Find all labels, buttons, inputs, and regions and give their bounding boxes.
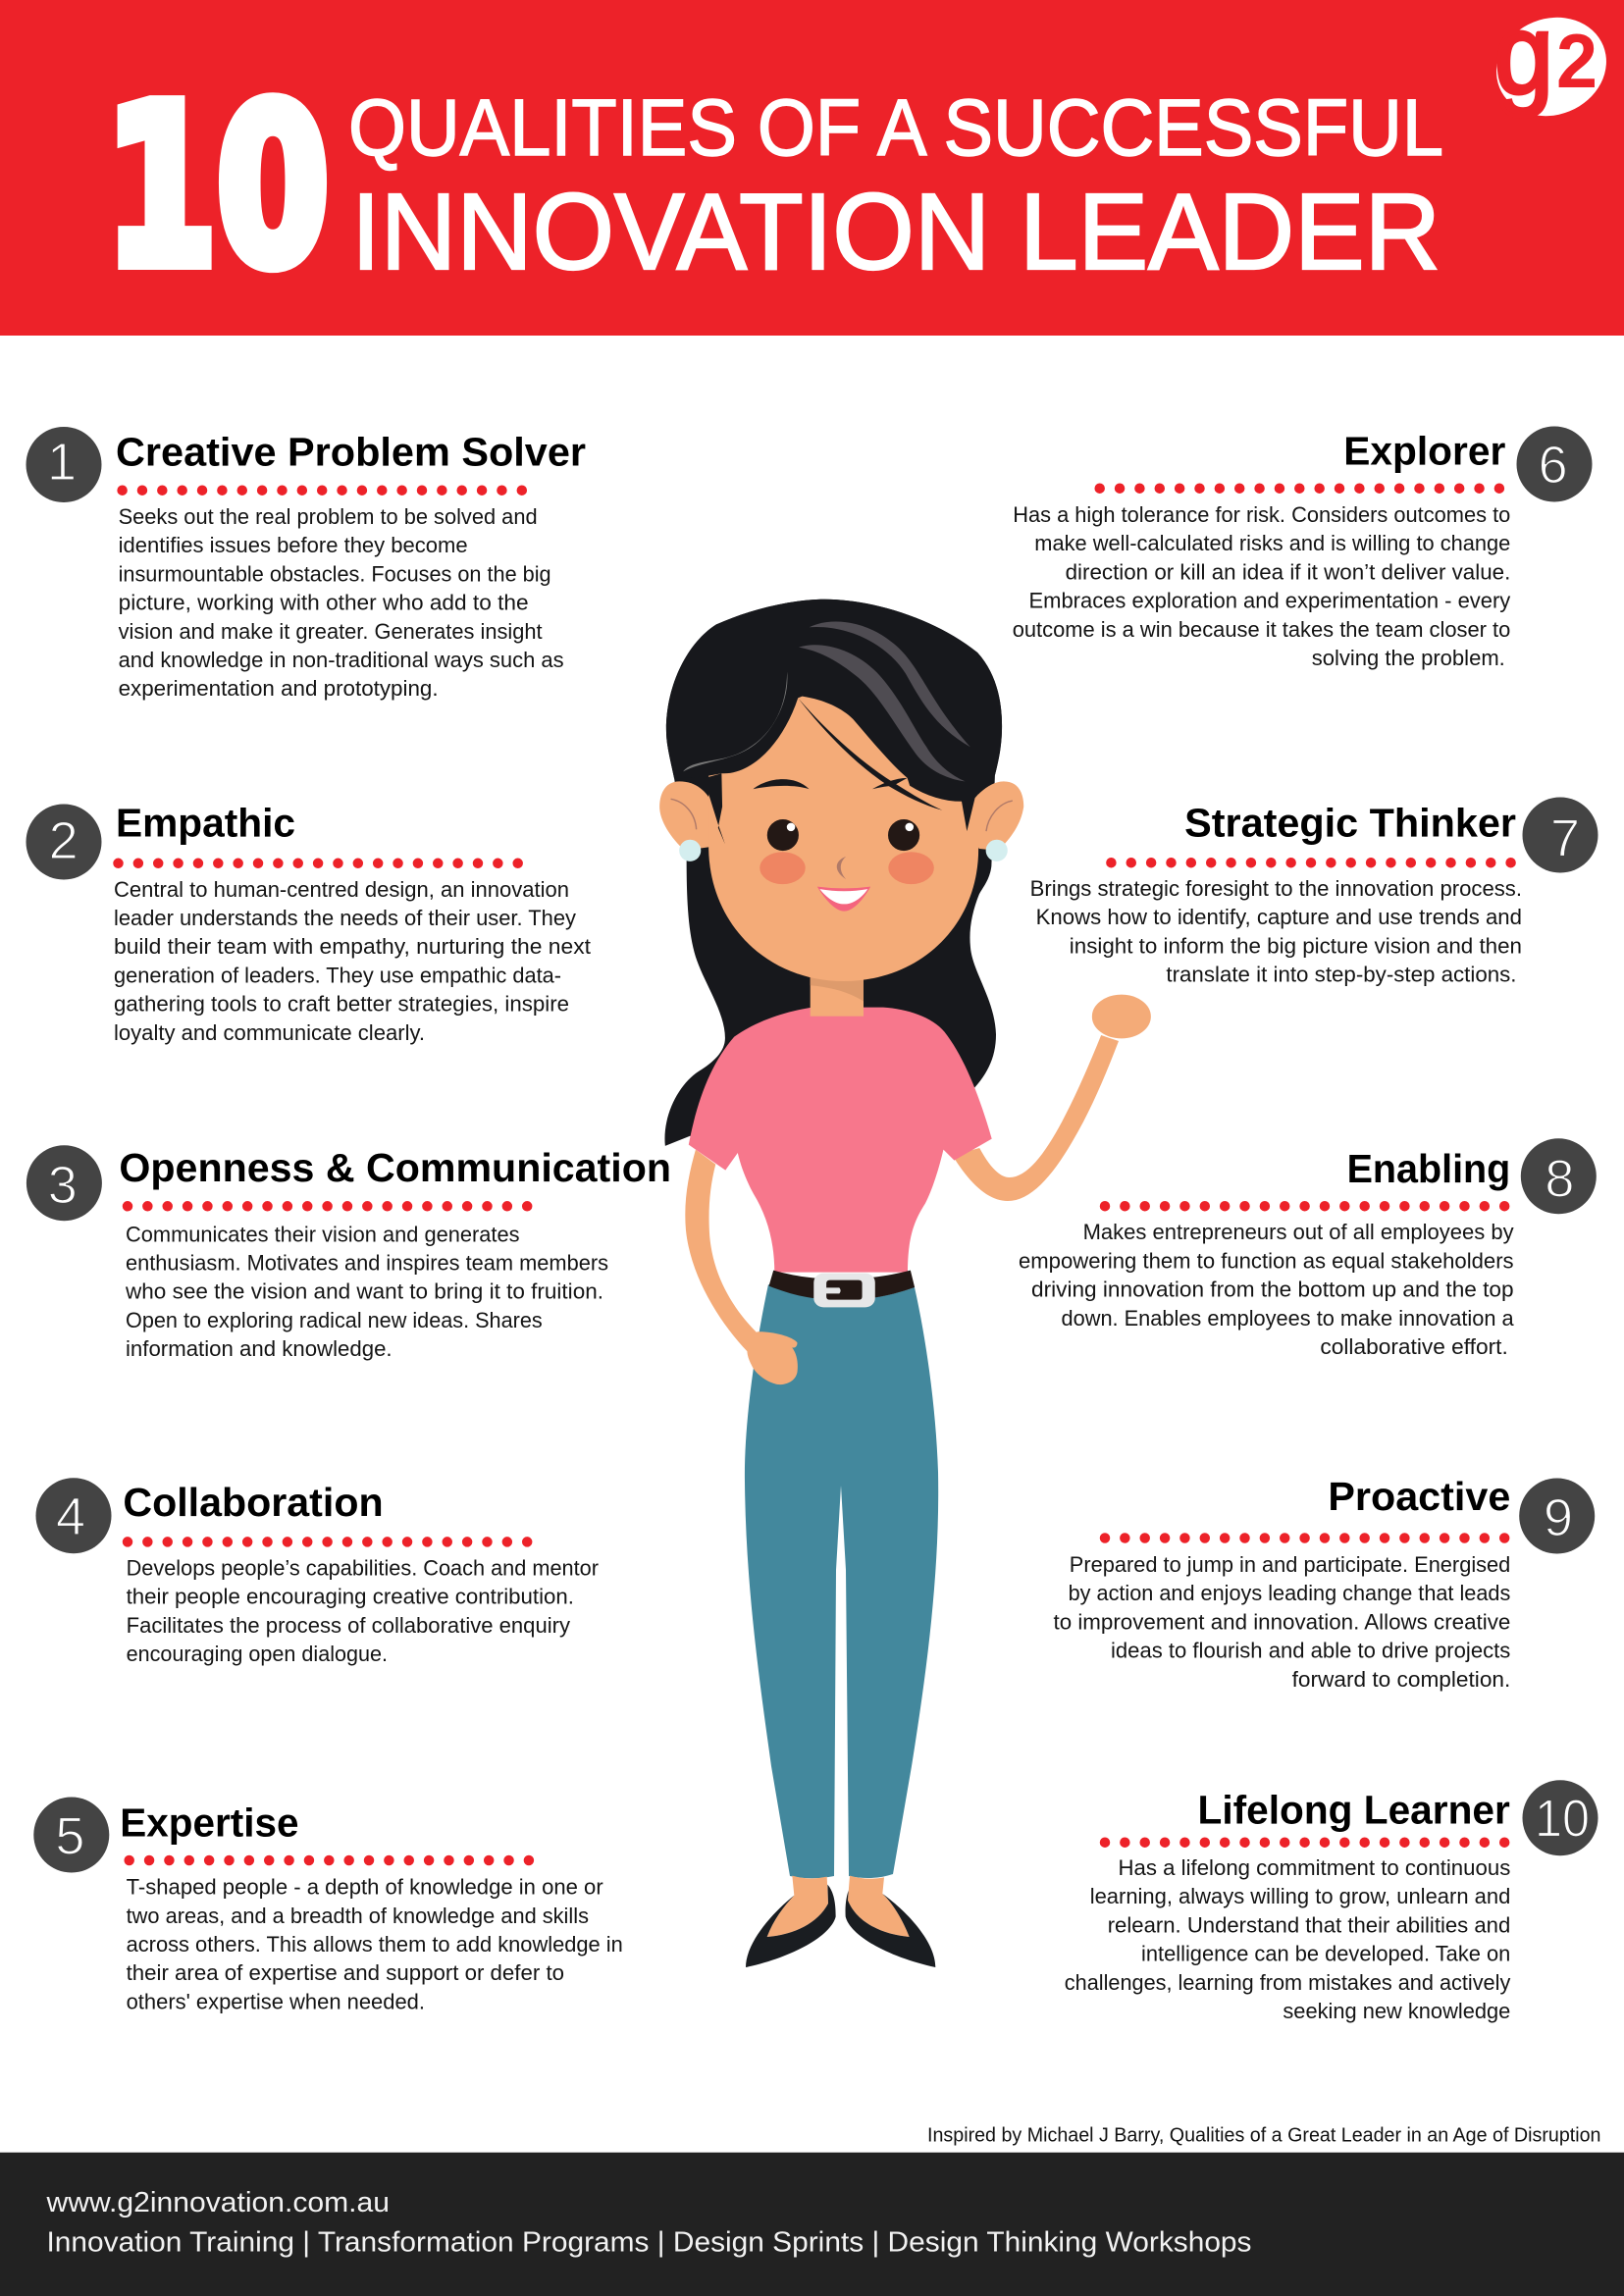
mouth	[817, 887, 870, 912]
header banner	[0, 0, 1624, 336]
badge 2	[26, 805, 102, 879]
big number 10: 10	[105, 61, 329, 314]
badge 10: 10	[1535, 1790, 1590, 1849]
panel 8: enabling	[1019, 1138, 1597, 1359]
panel 2: empathic	[26, 801, 591, 1045]
body 10	[1065, 1855, 1510, 2023]
front hair	[666, 600, 1002, 844]
body 8: empowering them to function as equal stakeholders	[1019, 1248, 1514, 1273]
hair back	[664, 600, 1002, 1146]
dotted rule 6	[1100, 483, 1500, 494]
body 1: and knowledge in non-traditional ways such as	[119, 648, 564, 672]
body 1	[119, 504, 564, 701]
dotted rule 1	[123, 485, 522, 496]
dotted rule 8	[1105, 1201, 1505, 1211]
badge 10	[1523, 1780, 1598, 1855]
body 3	[125, 1222, 608, 1361]
title line 2: INNOVATION LEADER	[351, 172, 1441, 292]
body 9	[1054, 1552, 1510, 1692]
badge 5	[33, 1798, 109, 1872]
badge 1: 1	[47, 433, 77, 492]
shirt, belt and hand	[689, 1008, 992, 1384]
dotted rule 2	[118, 859, 518, 868]
body 7	[1030, 876, 1522, 987]
badge 7	[1523, 797, 1598, 873]
body 6	[1013, 502, 1510, 670]
panel 4: collaboration	[35, 1478, 599, 1666]
badge 6: 6	[1539, 436, 1568, 495]
body 2: Central to human-centred design, an innovation	[114, 877, 569, 902]
panel 10: lifelong learner	[1065, 1780, 1598, 2023]
body 5: others' expertise when needed.	[127, 1989, 425, 2013]
badge 4	[35, 1478, 112, 1553]
nose	[837, 857, 846, 879]
source credit: Inspired by Michael J Barry, Qualities of a Great Leader in an Age of Disruption	[927, 2125, 1601, 2147]
badge 9: 9	[1544, 1488, 1573, 1547]
body 7: insight to inform the big picture vision and then	[1070, 933, 1522, 958]
badge 4: 4	[56, 1487, 85, 1546]
dotted rule 4	[128, 1537, 528, 1547]
body 10: Has a lifelong commitment to continuous	[1119, 1855, 1510, 1880]
body 4: their people encouraging creative contribution.	[127, 1585, 574, 1609]
body 5: across others. This allows them to add knowledge in	[127, 1932, 623, 1957]
body 10: seeking new knowledge	[1283, 1999, 1510, 2023]
body 7: Knows how to identify, capture and use trends and	[1036, 905, 1522, 929]
body 9: by action and enjoys leading change that leads	[1069, 1581, 1510, 1605]
body 9: to improvement and innovation. Allows creative	[1054, 1609, 1510, 1634]
heading 7: Strategic Thinker	[1184, 801, 1516, 846]
earrings	[679, 840, 1008, 861]
body 4: Develops people’s capabilities. Coach and mentor	[127, 1555, 599, 1580]
face	[708, 691, 978, 981]
arms	[685, 994, 1152, 1352]
body 8: collaborative effort.	[1320, 1334, 1508, 1359]
badge 3	[26, 1145, 102, 1221]
heading 8: Enabling	[1347, 1146, 1510, 1191]
body 2: loyalty and communicate clearly.	[114, 1020, 425, 1045]
body 5	[127, 1875, 623, 2013]
neck	[811, 975, 864, 1017]
dotted rule 5	[130, 1855, 530, 1865]
cheeks	[760, 852, 934, 884]
body 6: solving the problem.	[1312, 646, 1505, 670]
body 3: enthusiasm. Motivates and inspires team members	[126, 1250, 608, 1276]
body 6: outcome is a win because it takes the team closer to	[1013, 617, 1510, 642]
heading 9: Proactive	[1328, 1474, 1510, 1519]
badge 9	[1519, 1478, 1595, 1554]
badge 2: 2	[49, 811, 79, 870]
body 4	[127, 1555, 599, 1666]
title line 1: QUALITIES OF A SUCCESSFUL	[348, 83, 1443, 173]
dotted rule 7	[1111, 858, 1511, 867]
heading 4: Collaboration	[123, 1480, 384, 1525]
badge 8: 8	[1545, 1150, 1574, 1209]
panel 6: explorer	[1013, 426, 1592, 670]
dotted rule 3	[128, 1201, 528, 1212]
badge 5: 5	[55, 1807, 84, 1866]
illustration: woman innovation leader	[659, 600, 1152, 1967]
body 10: intelligence can be developed. Take on	[1141, 1942, 1510, 1966]
body 10: relearn. Understand that their abilities and	[1108, 1912, 1510, 1937]
body 1: vision and make it greater. Generates insight	[119, 619, 543, 644]
body 8: Makes entrepreneurs out of all employees by	[1083, 1220, 1514, 1244]
head	[659, 600, 1023, 1017]
body 5: T-shaped people - a depth of knowledge in one or	[127, 1875, 603, 1900]
body 3: information and knowledge.	[126, 1336, 393, 1361]
dotted rule 10	[1105, 1837, 1505, 1848]
body 6: Has a high tolerance for risk. Considers outcomes to	[1013, 502, 1510, 527]
panel 7: strategic thinker	[1030, 797, 1598, 987]
ears	[659, 781, 1023, 851]
heading 6: Explorer	[1343, 429, 1505, 474]
body 7: translate it into step-by-step actions.	[1166, 963, 1517, 987]
trousers	[745, 1284, 938, 1878]
body 3: who see the vision and want to bring it to fruition.	[125, 1279, 603, 1304]
heading 10: Lifelong Learner	[1197, 1787, 1510, 1832]
body 3: Open to exploring radical new ideas. Shares	[126, 1308, 543, 1332]
heading 1: Creative Problem Solver	[116, 430, 586, 475]
body 1: identifies issues before they become	[119, 533, 468, 557]
heading 2: Empathic	[116, 801, 295, 846]
eyes	[767, 819, 919, 851]
panel 3: openness and communication	[26, 1145, 671, 1361]
body 1: picture, working with other who add to the	[119, 591, 529, 615]
body 10: learning, always willing to grow, unlearn and	[1090, 1884, 1510, 1908]
body 4: Facilitates the process of collaborative enquiry	[127, 1613, 570, 1638]
body 8	[1019, 1220, 1514, 1359]
logo: g2: 2	[1556, 18, 1598, 104]
body 6: Embraces exploration and experimentation - every	[1028, 589, 1510, 613]
body 3: Communicates their vision and generates	[126, 1222, 520, 1246]
body 1: experimentation and prototyping.	[119, 676, 439, 701]
body 4: encouraging open dialogue.	[127, 1642, 388, 1666]
badge 8	[1521, 1138, 1597, 1214]
body 9: Prepared to jump in and participate. Energised	[1070, 1552, 1510, 1577]
panel 1: creative problem solver	[26, 427, 586, 701]
body 9: forward to completion.	[1292, 1667, 1510, 1692]
body 7: Brings strategic foresight to the innovation process.	[1030, 876, 1522, 901]
footer website: www.g2innovation.com.au	[45, 2187, 390, 2218]
body 1: insurmountable obstacles. Focuses on the big	[119, 561, 551, 586]
footer bar	[0, 2152, 1624, 2296]
badge 7: 7	[1550, 809, 1580, 868]
logo: g2	[1482, 0, 1621, 132]
heading 3: Openness & Communication	[119, 1145, 671, 1190]
badge 6	[1517, 426, 1592, 502]
body 6: make well-calculated risks and is willing to change	[1034, 531, 1510, 555]
body 9: ideas to flourish and able to drive projects	[1111, 1639, 1510, 1663]
body 2: leader understands the needs of their user. They	[114, 906, 576, 930]
body 2: generation of leaders. They use empathic data-	[114, 963, 561, 987]
body 2: gathering tools to craft better strategies, inspire	[114, 992, 569, 1017]
eyebrows	[753, 778, 908, 789]
body 6: direction or kill an idea if it won’t deliver value.	[1066, 559, 1510, 584]
body 5: two areas, and a breadth of knowledge and skills	[127, 1904, 589, 1928]
body 8: driving innovation from the bottom up and the top	[1031, 1278, 1514, 1302]
feet and shoes	[746, 1876, 935, 1967]
body 8: down. Enables employees to make innovation a	[1062, 1306, 1514, 1331]
dotted rule 9	[1105, 1533, 1505, 1543]
body 10: challenges, learning from mistakes and actively	[1065, 1970, 1510, 1995]
body 2	[114, 877, 591, 1045]
badge 3: 3	[48, 1156, 78, 1215]
panel 9: proactive	[1054, 1474, 1595, 1692]
panel 5: expertise	[33, 1798, 623, 2013]
body 1: Seeks out the real problem to be solved and	[119, 504, 538, 529]
heading 5: Expertise	[120, 1800, 298, 1845]
badge 1	[26, 427, 102, 502]
body 2: build their team with empathy, nurturing the next	[114, 934, 591, 959]
body 5: their area of expertise and support or defer to	[127, 1960, 564, 1985]
footer services: Innovation Training | Transformation Programs | Design Sprints | Design Thinking Workshops	[47, 2227, 1252, 2259]
